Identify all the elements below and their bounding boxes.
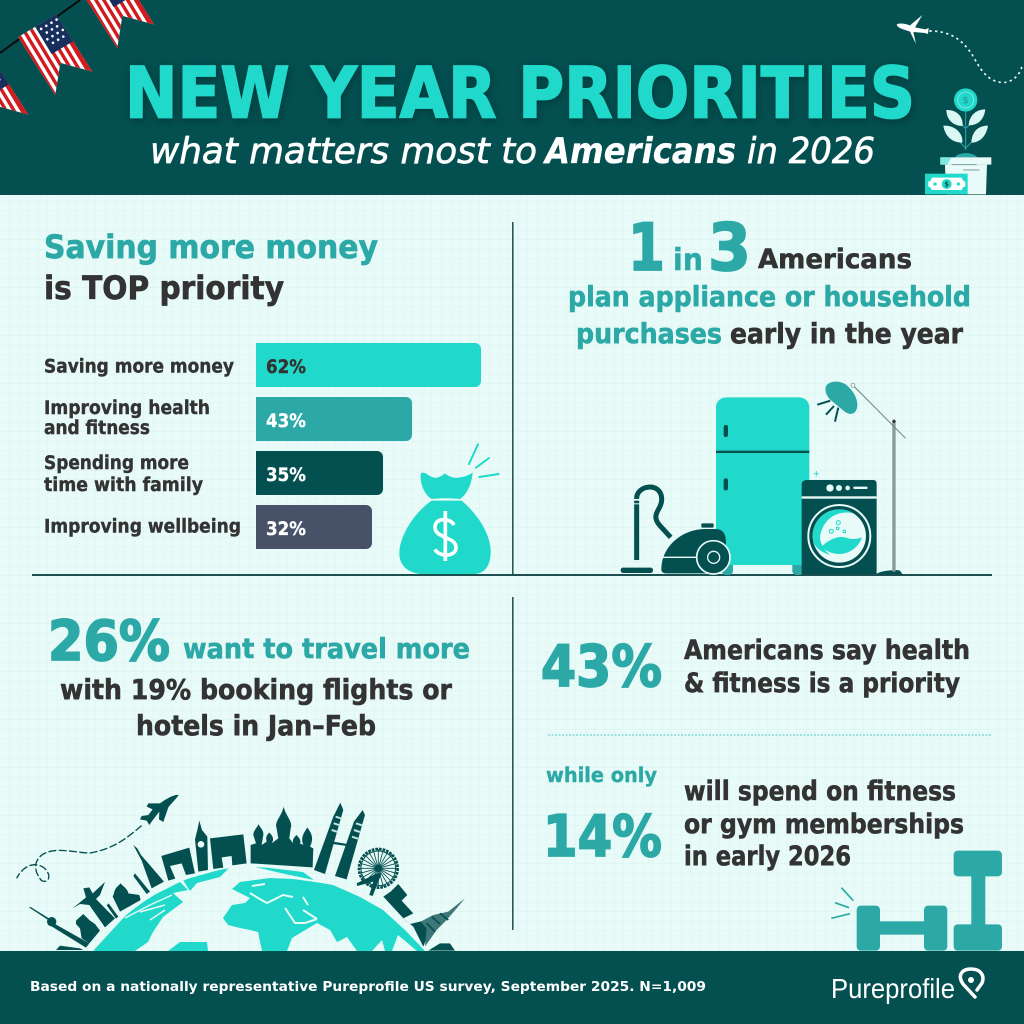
panel: travel: [17, 609, 470, 951]
bar: improving wellbeing 32%: Improving wellbeing: [44, 516, 241, 538]
bar: improving health and fitness 43%: Improving health: [44, 398, 210, 419]
icon: money plant in pot with banknote: $: [962, 96, 969, 107]
headline: 1 in 3 Americans: Americans: [758, 244, 912, 275]
bar: spending more time with family 35%: 35%: [266, 465, 306, 486]
text: plan appliance or household purchases: plan appliance or household: [568, 281, 971, 313]
bar: spending more time with family 35%: Spending more: [44, 453, 189, 474]
text: booking flights or hotels: hotels in Jan–Feb: [136, 710, 376, 742]
washing machine: [802, 480, 877, 574]
heading: saving more money: Saving more money: [44, 228, 378, 266]
headline: 1 in 3 Americans: in: [673, 243, 703, 278]
illustration: household appliances: [621, 382, 906, 575]
landmark silhouettes: [29, 803, 455, 951]
subtitle: [150, 131, 875, 172]
stat: 43%: 43%: [541, 634, 662, 700]
panel: top priority: [44, 228, 499, 574]
icon: dumbbells: [831, 851, 1002, 951]
label: while only: while only: [546, 763, 657, 787]
text: booking flights or hotels: with 19% booking flights or: [60, 674, 452, 706]
bar: improving health and fitness 43%: and fitness: [44, 418, 150, 439]
Eiffel tower: [421, 898, 465, 947]
heading: saving more money: is TOP priority: [44, 269, 284, 307]
icon: money plant in pot with banknote: $: [944, 181, 949, 189]
text: will spend on fitness or gym memberships: will spend on fitness: [684, 776, 956, 807]
stat: 26% want to travel more: want to travel more: [183, 633, 470, 665]
text: Americans say health and fitness is a priority: & fitness is a priority: [684, 668, 960, 699]
header band: [0, 0, 1024, 195]
bar: saving more money 62%: Saving more money: [44, 356, 234, 378]
text: Americans say health and fitness is a priority: Americans say health: [684, 635, 970, 666]
footer band: [0, 951, 1024, 1024]
source note: Based on a nationally representative Pureprofile US survey, September 2025. N=1,009: [30, 979, 706, 995]
stat: 14%: 14%: [543, 804, 662, 870]
bar: improving health and fitness 43%: 43%: [266, 411, 306, 432]
small airplane with dashed route: [17, 795, 179, 881]
text: booking flights or hotels: [60, 674, 452, 742]
text: plan appliance or household purchases: [568, 281, 971, 350]
globe: [93, 867, 425, 951]
headline: 1 in 3 Americans: [628, 211, 912, 286]
bar chart: [44, 343, 481, 549]
heading: saving more money: [44, 228, 378, 307]
floor lamp: [817, 382, 906, 575]
icon: money bag: [399, 444, 499, 574]
bar: saving more money 62%: [44, 343, 481, 387]
bar: improving health and fitness 43%: [44, 397, 412, 441]
text: Americans say health and fitness is a priority: [684, 635, 970, 699]
subtitle: in 2026: [747, 131, 875, 172]
headline: 1 in 3 Americans: 3: [708, 211, 751, 286]
headline: 1 in 3 Americans: 1: [628, 211, 665, 286]
subtitle: Americans: [542, 131, 736, 172]
fridge: [716, 397, 819, 575]
icon: money plant in pot with banknote: [925, 88, 991, 194]
bar: improving wellbeing 32%: 32%: [266, 519, 306, 540]
icon: airplane with dotted route: [897, 15, 1022, 83]
stat: 26% want to travel more: [48, 609, 470, 673]
panel: health and fitness: [541, 634, 1002, 951]
subtitle: what matters most to: [150, 131, 537, 172]
text: will spend on fitness or gym memberships: [684, 776, 964, 872]
title: NEW YEAR PRIORITIES: [125, 52, 915, 134]
text: plan appliance or household purchases: early in the year: [730, 318, 963, 350]
text: plan appliance or household purchases: purchases: [576, 318, 722, 350]
bar: saving more money 62%: 62%: [266, 357, 306, 378]
divider lines: [32, 222, 992, 930]
logo: Pureprofile: Pureprofile: [831, 973, 955, 1004]
bar: spending more time with family 35%: [44, 451, 383, 496]
text: will spend on fitness or gym memberships: in early 2026: [684, 841, 851, 872]
ferris wheel: [359, 849, 398, 888]
illustration: globe with world landmarks: [17, 795, 465, 951]
panel: appliance purchases: [568, 211, 971, 575]
stat: 26% want to travel more: 26%: [48, 609, 170, 673]
vacuum cleaner: [621, 487, 730, 574]
bunting of US flags: [0, 0, 156, 140]
bar: improving wellbeing 32%: [44, 505, 372, 549]
text: will spend on fitness or gym memberships: or gym memberships: [684, 809, 964, 840]
bar: spending more time with family 35%: time with family: [44, 475, 203, 496]
